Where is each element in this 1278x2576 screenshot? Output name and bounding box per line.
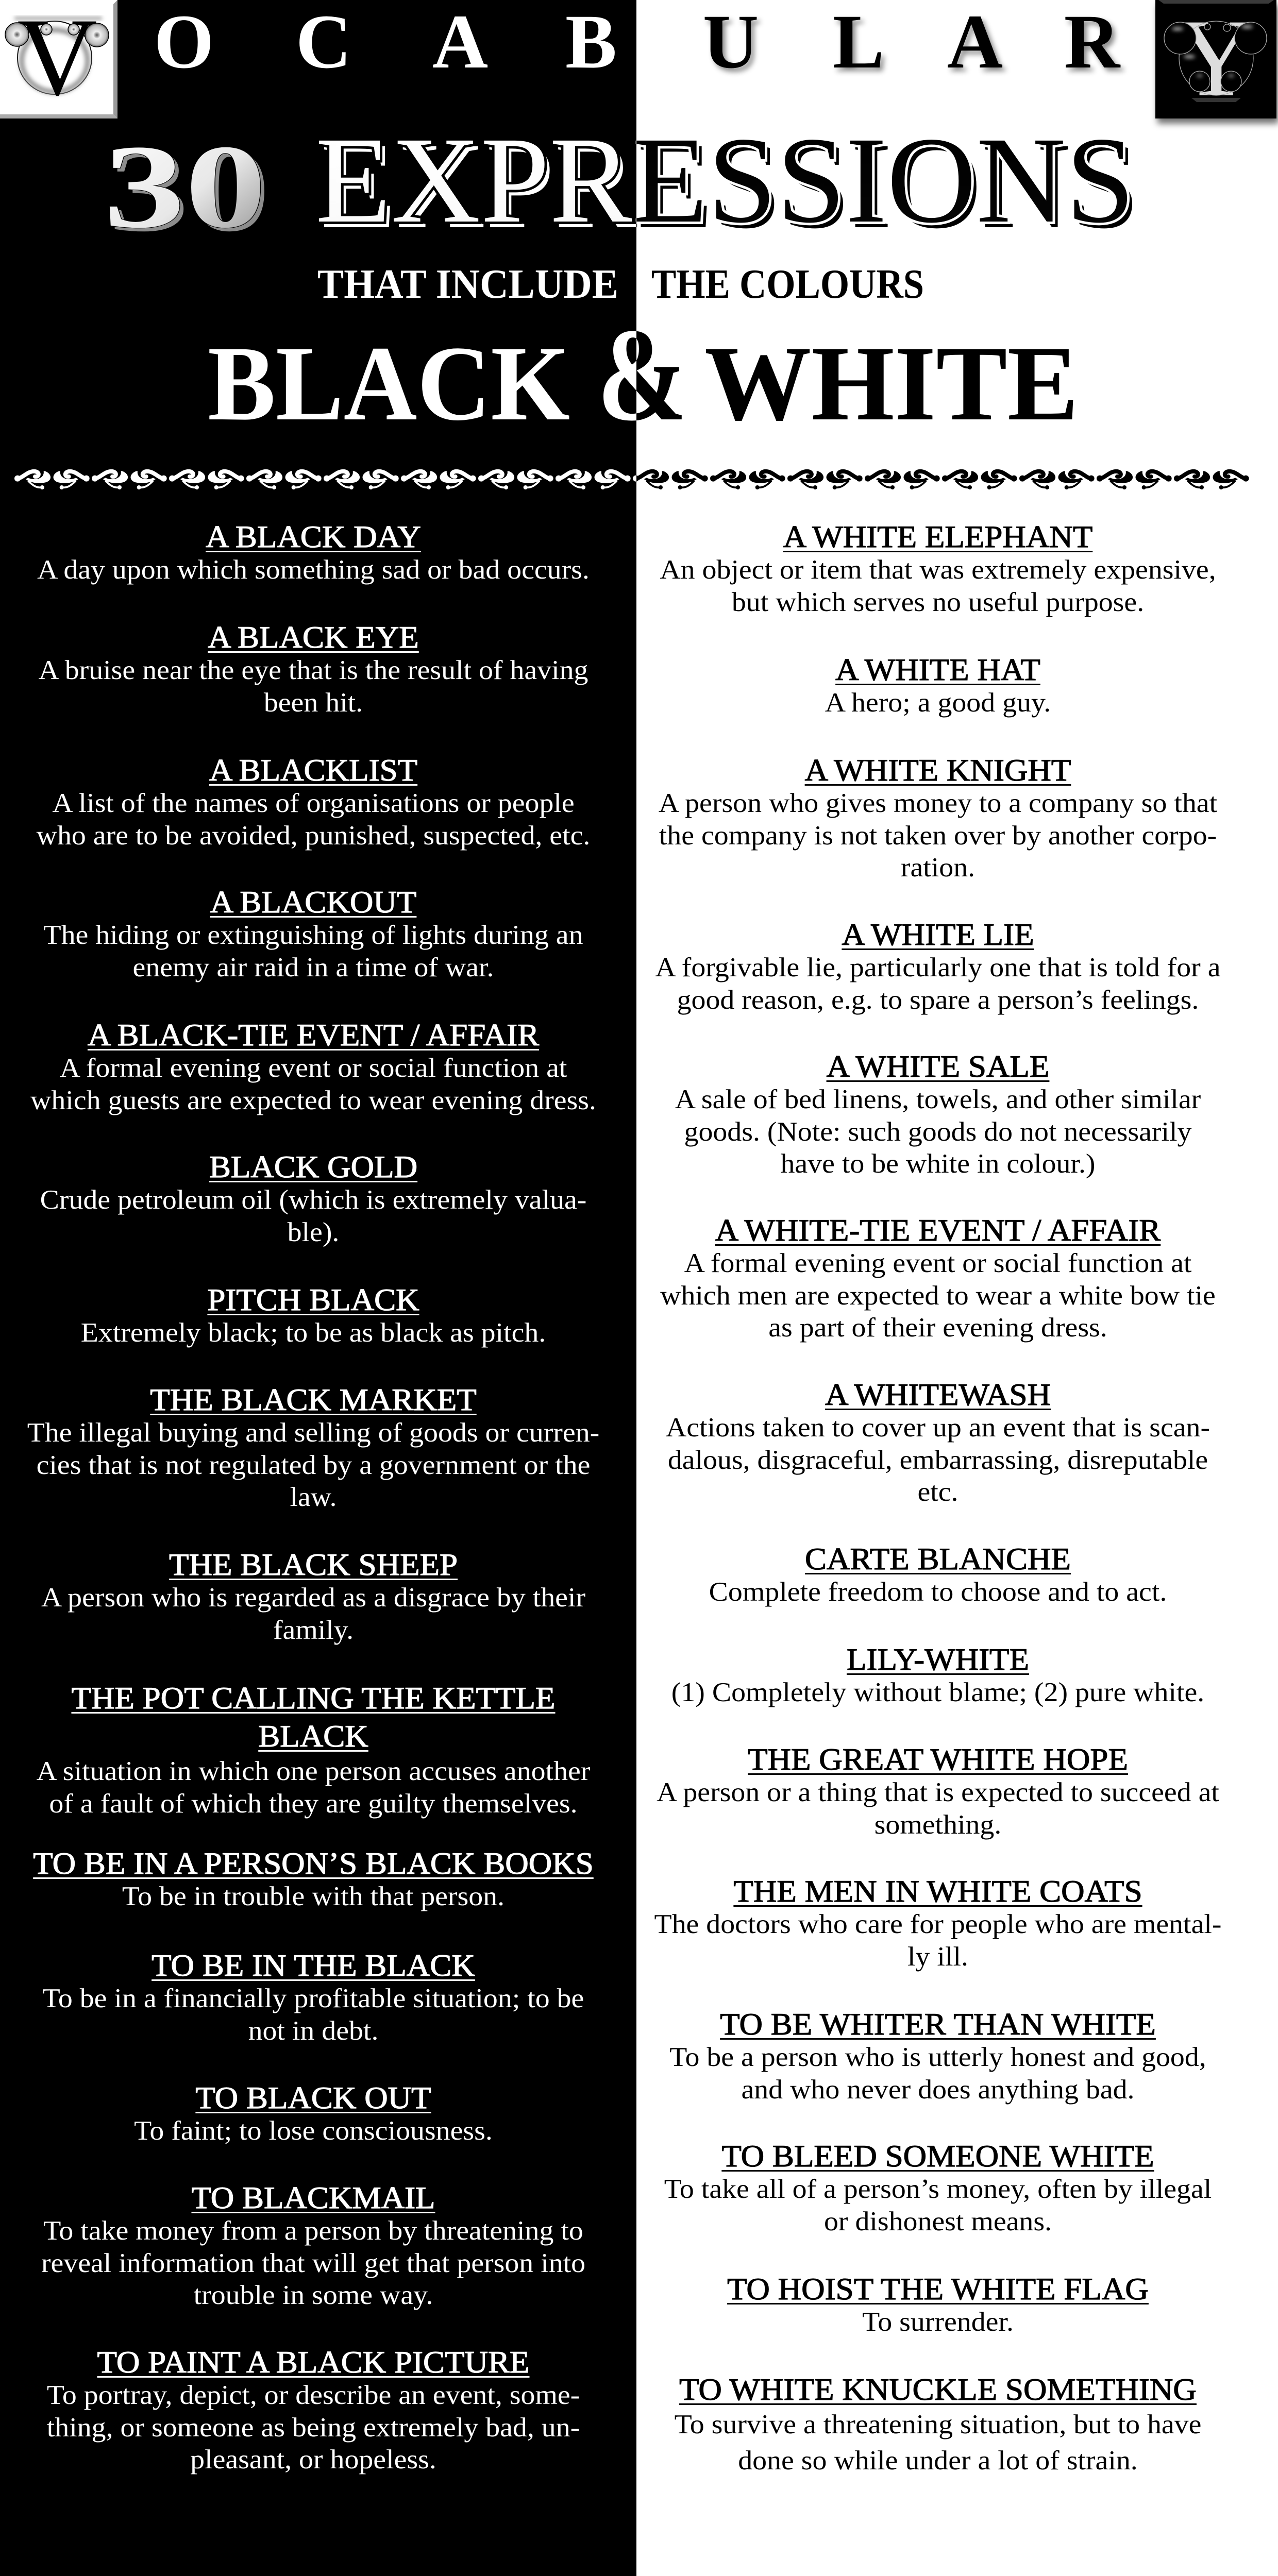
expression: the pot calling the kettle black bbox=[37, 1681, 590, 1819]
expression: a black-tie event: which guests are expected to wear evening dress. bbox=[30, 1085, 596, 1115]
expression: a white-tie event: A formal evening event or social function at bbox=[684, 1248, 1191, 1278]
expression: to be in the black: To be in a financially profitable situation; to be bbox=[43, 1983, 584, 2013]
expression: to bleed someone white bbox=[621, 2140, 1254, 2238]
expression: lily-white bbox=[621, 1643, 1254, 1708]
expression: a white lie: A forgivable lie, particularly one that is told for a bbox=[655, 952, 1220, 982]
expression: a white hat bbox=[825, 653, 1051, 718]
letters on black: C bbox=[296, 0, 351, 84]
expression: to be whiter than white: To be a person who is utterly honest and good, bbox=[669, 2042, 1206, 2072]
background: black left half bbox=[0, 0, 636, 2576]
expression: a white hat: A WHITE HAT bbox=[835, 653, 1040, 687]
expression: the men in white coats: ly ill. bbox=[907, 1941, 968, 1971]
expression: the pot calling the kettle black: A situation in which one person accuses another bbox=[37, 1756, 590, 1786]
expression: pitch black: Extremely black; to be as black as pitch. bbox=[81, 1317, 546, 1348]
expression: a blackout: The hiding or extinguishing of lights during an bbox=[43, 920, 583, 950]
letters on black: A bbox=[432, 0, 488, 84]
letters on white: L bbox=[833, 0, 884, 84]
expression: carte blanche: Complete freedom to choose and to act. bbox=[709, 1577, 1167, 1607]
expression: the great white hope: THE GREAT WHITE HOPE bbox=[748, 1742, 1128, 1776]
expression: to be in a person's black books: TO BE IN A PERSON’S BLACK BOOKS bbox=[33, 1846, 594, 1880]
expression: a blackout: enemy air raid in a time of war. bbox=[133, 952, 494, 982]
icon: Y drop-cap tile bbox=[1149, 0, 1278, 135]
expression: to bleed someone white: To take all of a person’s money, often by illegal bbox=[664, 2174, 1212, 2204]
expression: a whitewash: etc. bbox=[917, 1477, 959, 1507]
expression: to blackmail: TO BLACKMAIL bbox=[191, 2181, 435, 2215]
expression: a white hat: A hero; a good guy. bbox=[825, 687, 1051, 718]
expression: a black day bbox=[37, 520, 590, 585]
expression: a white knight: the company is not taken over by another corpo- bbox=[659, 820, 1217, 850]
expression: to paint a black picture: To portray, depict, or describe an event, some- bbox=[47, 2380, 580, 2410]
expression: to black out: To faint; to lose consciousness. bbox=[134, 2115, 493, 2146]
expression: a blacklist: who are to be avoided, punished, suspected, etc. bbox=[37, 820, 590, 850]
expression: to black out: TO BLACK OUT bbox=[195, 2081, 431, 2115]
expression: a white-tie event: as part of their evening dress. bbox=[768, 1312, 1107, 1343]
expression: a black-tie event: A formal evening event or social function at bbox=[60, 1053, 567, 1083]
expression: a white knight: ration. bbox=[901, 852, 975, 883]
expression: to hoist the white flag: To surrender. bbox=[862, 2307, 1014, 2337]
expression: a blacklist bbox=[36, 753, 590, 850]
expression: a blacklist: A list of the names of organisations or people bbox=[52, 788, 575, 818]
icon: Y drop-cap tile: Y bbox=[1176, 0, 1256, 120]
expression: the black sheep: THE BLACK SHEEP bbox=[169, 1548, 458, 1582]
expression: a black-tie event: A BLACK-TIE EVENT / AFFAIR bbox=[88, 1018, 539, 1052]
inverting title and top ornament layer bbox=[0, 129, 1278, 500]
panel: black expressions column bbox=[27, 520, 599, 2475]
expression: to be in the black: TO BE IN THE BLACK bbox=[152, 1948, 475, 1982]
expression: carte blanche: CARTE BLANCHE bbox=[805, 1542, 1071, 1576]
expression: a black eye bbox=[39, 620, 588, 717]
subtitle: that include: THAT INCLUDE bbox=[317, 262, 618, 307]
expression: the black market: The illegal buying and selling of goods or curren- bbox=[27, 1417, 599, 1448]
expression: the pot calling the kettle black: THE POT CALLING THE KETTLE bbox=[71, 1681, 556, 1715]
expression: a blacklist: A BLACKLIST bbox=[209, 753, 417, 787]
expression: a white sale: have to be white in colour.) bbox=[780, 1148, 1096, 1179]
expression: a white lie: A WHITE LIE bbox=[842, 918, 1034, 952]
expression: to paint a black picture: thing, or someone as being extremely bad, un- bbox=[47, 2412, 580, 2442]
expression: a white-tie event: A WHITE-TIE EVENT / AFFAIR bbox=[715, 1213, 1161, 1247]
expression: a white sale: A sale of bed linens, towels, and other similar bbox=[675, 1084, 1201, 1114]
subtitle: the colours: THE COLOURS bbox=[651, 262, 924, 307]
expression: the great white hope: A person or a thing that is expected to succeed at bbox=[657, 1777, 1219, 1807]
expression: a white sale bbox=[675, 1049, 1201, 1179]
expression: a whitewash: dalous, disgraceful, embarrassing, disreputable bbox=[668, 1445, 1208, 1475]
expression: a white elephant: An object or item that was extremely expensive, bbox=[660, 554, 1216, 585]
expression: a white-tie event: which men are expected to wear a white bow tie bbox=[660, 1280, 1216, 1311]
letters on white: A bbox=[947, 0, 1003, 84]
panel: white expressions column bbox=[654, 520, 1221, 2476]
expression: the pot calling the kettle black: of a fault of which they are guilty themselves. bbox=[49, 1788, 578, 1819]
expression: the pot calling the kettle black: BLACK bbox=[258, 1719, 368, 1753]
expression: the black market: THE BLACK MARKET bbox=[150, 1383, 477, 1417]
expression: to hoist the white flag: TO HOIST THE WHITE FLAG bbox=[727, 2272, 1149, 2306]
expression: a white sale: goods. (Note: such goods do not necessarily bbox=[684, 1116, 1191, 1147]
expression: black gold: BLACK GOLD bbox=[209, 1150, 417, 1184]
heading: white: WHITE bbox=[704, 324, 1079, 443]
expression: the black market: law. bbox=[290, 1482, 337, 1512]
expression: lily-white: LILY-WHITE bbox=[847, 1642, 1029, 1676]
letters on white bbox=[703, 0, 1121, 84]
expression: to paint a black picture: pleasant, or hopeless. bbox=[190, 2444, 436, 2475]
expression: to paint a black picture: TO PAINT A BLACK PICTURE bbox=[97, 2345, 529, 2379]
expression: a blackout: A BLACKOUT bbox=[210, 885, 416, 919]
expression: a white-tie event bbox=[621, 1214, 1254, 1344]
letters on white: U bbox=[703, 0, 759, 84]
expression: the black market: cies that is not regulated by a government or the bbox=[37, 1450, 590, 1480]
expression: a white elephant: but which serves no useful purpose. bbox=[732, 586, 1144, 617]
heading row: vocabulary bbox=[0, 0, 1278, 124]
expression: a white knight: A WHITE KNIGHT bbox=[805, 753, 1071, 787]
expression: pitch black: PITCH BLACK bbox=[207, 1283, 419, 1317]
expression: to be whiter than white: and who never does anything bad. bbox=[741, 2074, 1135, 2104]
expression: black gold: Crude petroleum oil (which is extremely valua- bbox=[40, 1184, 586, 1215]
letters on black: O bbox=[154, 0, 214, 84]
expression: a black day: A BLACK DAY bbox=[206, 520, 421, 554]
expression: to bleed someone white: TO BLEED SOMEONE WHITE bbox=[721, 2139, 1154, 2173]
expression: a black eye: been hit. bbox=[264, 687, 363, 717]
expression: a white lie bbox=[655, 918, 1220, 1015]
expression: to be in a person's black books bbox=[33, 1846, 594, 1911]
expression: a black-tie event bbox=[30, 1018, 596, 1115]
expression: the great white hope: something. bbox=[875, 1809, 1001, 1839]
expression: a whitewash: A WHITEWASH bbox=[825, 1378, 1051, 1412]
expression: to paint a black picture bbox=[47, 2345, 580, 2475]
expression: to white knuckle something bbox=[621, 2373, 1254, 2479]
expression: a white elephant: A WHITE ELEPHANT bbox=[783, 520, 1092, 554]
letters on white: R bbox=[1064, 0, 1121, 84]
expression: a white knight: A person who gives money to a company so that bbox=[659, 788, 1217, 818]
expression: a white sale: A WHITE SALE bbox=[827, 1049, 1049, 1083]
expression: to be in the black: not in debt. bbox=[248, 2015, 378, 2045]
expression: to be in the black bbox=[43, 1948, 584, 2045]
expression: to blackmail: To take money from a person by threatening to bbox=[43, 2215, 583, 2246]
expression: to black out bbox=[134, 2081, 493, 2146]
expression: pitch black bbox=[81, 1283, 546, 1348]
heading: ampersand: & bbox=[597, 301, 687, 448]
expression: a white knight bbox=[659, 753, 1217, 883]
expression: the men in white coats: The doctors who care for people who are mental- bbox=[654, 1909, 1221, 1939]
expression: to bleed someone white: or dishonest means. bbox=[824, 2206, 1052, 2236]
expression: the black sheep: A person who is regarded as a disgrace by their bbox=[41, 1582, 585, 1613]
ornament: top divider bbox=[14, 466, 1251, 492]
expression: the black market bbox=[27, 1383, 599, 1512]
expression: a black day: A day upon which something sad or bad occurs. bbox=[37, 554, 590, 585]
expression: to be whiter than white: TO BE WHITER THAN WHITE bbox=[720, 2007, 1156, 2041]
expression: to hoist the white flag bbox=[621, 2273, 1254, 2338]
title: 30 bbox=[104, 121, 271, 257]
expression: to blackmail bbox=[41, 2181, 585, 2310]
expression: to be whiter than white bbox=[621, 2008, 1254, 2106]
expression: the men in white coats: THE MEN IN WHITE COATS bbox=[733, 1874, 1142, 1908]
expression: a black eye: A bruise near the eye that is the result of having bbox=[39, 655, 588, 685]
expression: the great white hope bbox=[621, 1743, 1254, 1841]
expression: lily-white: (1) Completely without blame; (2) pure white. bbox=[671, 1677, 1204, 1707]
expression: a white lie: good reason, e.g. to spare a person’s feelings. bbox=[677, 984, 1199, 1015]
heading: black: BLACK bbox=[208, 324, 570, 443]
expression: black gold bbox=[40, 1150, 586, 1247]
expression: the black sheep: family. bbox=[273, 1615, 354, 1645]
expression: carte blanche bbox=[621, 1543, 1254, 1608]
expression: a blackout bbox=[43, 885, 583, 982]
expression: the men in white coats bbox=[621, 1875, 1254, 1973]
letters on black bbox=[154, 0, 617, 84]
expression: a whitewash bbox=[621, 1378, 1254, 1509]
expression: to white knuckle something: To survive a threatening situation, but to have bbox=[675, 2409, 1201, 2439]
expression: black gold: ble). bbox=[288, 1217, 339, 1247]
icon: V drop-cap tile bbox=[0, 0, 124, 124]
expression: a whitewash: Actions taken to cover up an event that is scan- bbox=[666, 1412, 1210, 1443]
expression: to white knuckle something: TO WHITE KNUCKLE SOMETHING bbox=[679, 2372, 1197, 2406]
expression: the black sheep bbox=[41, 1548, 585, 1645]
letters on black: B bbox=[565, 0, 617, 84]
expression: to white knuckle something: done so while under a lot of strain. bbox=[738, 2445, 1138, 2476]
expression: to be in a person's black books: To be in trouble with that person. bbox=[122, 1881, 505, 1911]
expression: a black eye: A BLACK EYE bbox=[208, 620, 419, 654]
expression: to blackmail: trouble in some way. bbox=[194, 2280, 433, 2310]
expression: a white elephant bbox=[660, 520, 1216, 617]
expression: to blackmail: reveal information that will get that person into bbox=[41, 2247, 585, 2278]
